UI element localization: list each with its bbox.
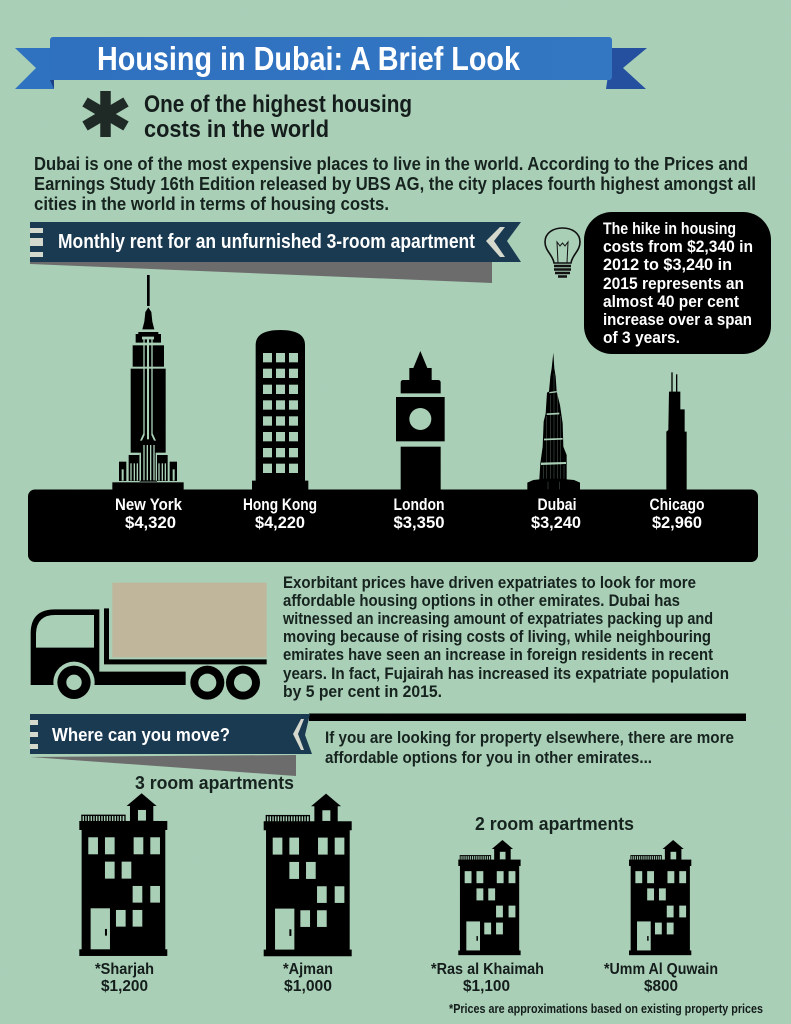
intro paragraph bbox=[34, 154, 756, 214]
icon: New York skyscraper bbox=[112, 275, 184, 490]
platform with city labels: Hong Kong bbox=[243, 495, 317, 514]
price labels: $1,100 bbox=[463, 978, 510, 995]
price labels: $800 bbox=[644, 978, 678, 995]
callout: hike in housing costs bbox=[584, 212, 771, 354]
price labels: *Sharjah bbox=[95, 961, 154, 978]
icon: Dubai Burj Khalifa bbox=[527, 353, 580, 490]
price labels: *Umm Al Quwain bbox=[604, 961, 718, 978]
price labels: $1,000 bbox=[284, 978, 332, 995]
section ribbon: monthly rent bbox=[30, 222, 521, 283]
callout: hike in housing costs: costs from $2,340 in bbox=[603, 238, 753, 256]
callout: hike in housing costs: of 3 years. bbox=[603, 329, 680, 347]
platform with city labels: Chicago bbox=[650, 495, 704, 514]
icon: light bulb bbox=[545, 228, 580, 276]
expatriates paragraph: moving because of rising costs of living, while neighbouring bbox=[283, 628, 711, 646]
icon: Umm Al Quwain building bbox=[629, 840, 691, 955]
intro paragraph: cities in the world in terms of housing costs. bbox=[34, 194, 389, 214]
platform with city labels: $2,960 bbox=[652, 513, 702, 532]
icon: Ras al Khaimah building bbox=[458, 840, 521, 955]
callout: hike in housing costs: almost 40 per cent bbox=[603, 293, 739, 311]
intro paragraph: Dubai is one of the most expensive places to live in the world. According to the Prices and bbox=[34, 154, 748, 174]
price labels: *Ajman bbox=[283, 961, 333, 978]
icon: Sharjah building bbox=[79, 793, 167, 956]
platform with city labels: $4,320 bbox=[125, 513, 176, 532]
platform with city labels: $4,220 bbox=[255, 513, 305, 532]
ribbon heading: Where can you move? bbox=[52, 725, 230, 745]
price labels bbox=[95, 961, 718, 995]
icon: asterisk bbox=[85, 91, 126, 137]
expatriates paragraph bbox=[282, 574, 729, 701]
expatriates paragraph: Exorbitant prices have driven expatriates to look for more bbox=[283, 574, 696, 592]
ribbon heading: Monthly rent for an unfurnished 3-room apartment bbox=[58, 231, 475, 253]
subheading: One of the highest housing bbox=[144, 91, 412, 118]
section ribbon: where can you move bbox=[30, 714, 746, 776]
callout: hike in housing costs: 2012 to $3,240 in bbox=[603, 256, 732, 274]
icon: moving truck bbox=[31, 583, 267, 703]
title banner bbox=[15, 37, 647, 89]
price labels: *Ras al Khaimah bbox=[431, 961, 544, 978]
heading: 2 room apartments: 2 room apartments bbox=[475, 814, 634, 834]
expatriates paragraph: affordable housing options in other emirates. Dubai has bbox=[283, 592, 680, 610]
platform with city labels: $3,240 bbox=[531, 513, 581, 532]
platform with city labels: New York bbox=[115, 495, 182, 514]
move intro text: If you are looking for property elsewhere, there are more bbox=[325, 729, 734, 747]
icon: Ajman building bbox=[264, 794, 352, 956]
move intro text: affordable options for you in other emirates... bbox=[325, 749, 652, 767]
expatriates paragraph: by 5 per cent in 2015. bbox=[283, 683, 442, 701]
platform with city labels: London bbox=[394, 495, 444, 514]
callout: hike in housing costs: 2015 represents an bbox=[603, 275, 744, 293]
icon: Chicago Willis Tower bbox=[666, 372, 687, 490]
expatriates paragraph: years. In fact, Fujairah has increased its expatriate population bbox=[283, 665, 729, 683]
icon: London Big Ben bbox=[396, 351, 445, 491]
title: Housing in Dubai: A Brief Look bbox=[97, 40, 521, 77]
heading: 3 room apartments: 3 room apartments bbox=[135, 773, 294, 793]
subheading: costs in the world bbox=[144, 116, 329, 143]
platform with city labels: $3,350 bbox=[394, 513, 444, 532]
callout: hike in housing costs: The hike in housing bbox=[603, 220, 736, 238]
icon: Hong Kong tower bbox=[252, 330, 308, 490]
price labels: $1,200 bbox=[101, 978, 148, 995]
expatriates paragraph: witnessed an increasing amount of expatriates packing up and bbox=[282, 610, 713, 628]
subheading bbox=[144, 91, 412, 143]
platform with city labels: Dubai bbox=[538, 495, 576, 514]
move intro text bbox=[325, 729, 734, 767]
platform with city labels bbox=[28, 490, 758, 562]
callout: hike in housing costs: increase over a span bbox=[603, 311, 752, 329]
expatriates paragraph: emirates have seen an increase in foreign residents in recent bbox=[283, 646, 713, 664]
